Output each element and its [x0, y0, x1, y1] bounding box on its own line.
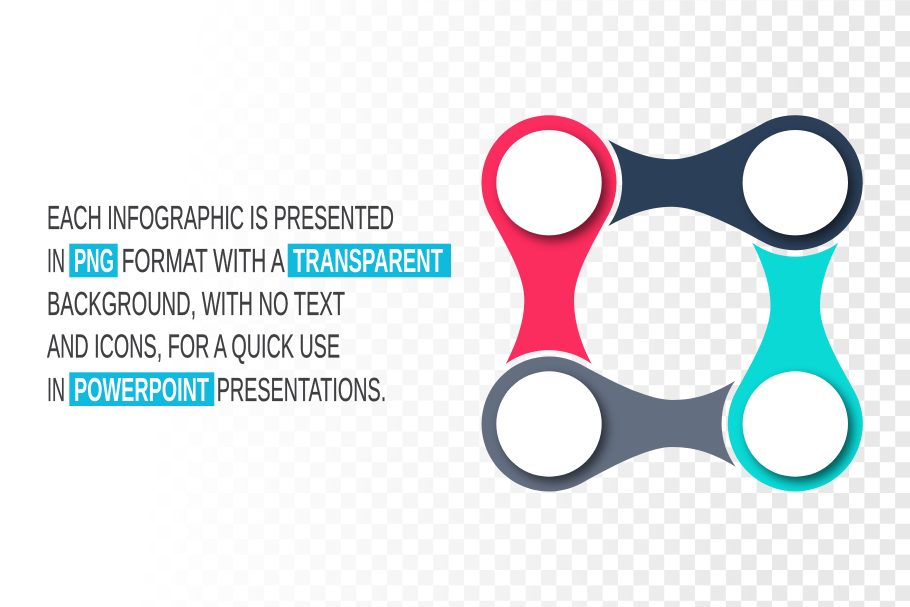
line 1: EACH INFOGRAPHIC IS PRESENTED: [47, 200, 394, 237]
segment: pink left: [482, 115, 616, 364]
segment: navy top: [608, 115, 863, 250]
line 2: [47, 243, 451, 280]
text block: description: [47, 200, 451, 409]
line 5: IN: [47, 372, 65, 409]
line 2: PNG: [74, 243, 114, 280]
line 2: TRANSPARENT: [293, 243, 443, 280]
line 3: BACKGROUND, WITH NO TEXT: [47, 286, 345, 323]
line 2: FORMAT WITH A: [122, 243, 285, 280]
line 5: PRESENTATIONS.: [217, 372, 386, 409]
segment: grey bottom: [482, 356, 736, 491]
line 5: [47, 372, 386, 409]
line 2: IN: [47, 243, 65, 280]
segment: teal right: [728, 243, 863, 491]
cycle diagram: [482, 115, 863, 491]
line 4: AND ICONS, FOR A QUICK USE: [47, 328, 340, 366]
line 5: POWERPOINT: [74, 372, 209, 409]
